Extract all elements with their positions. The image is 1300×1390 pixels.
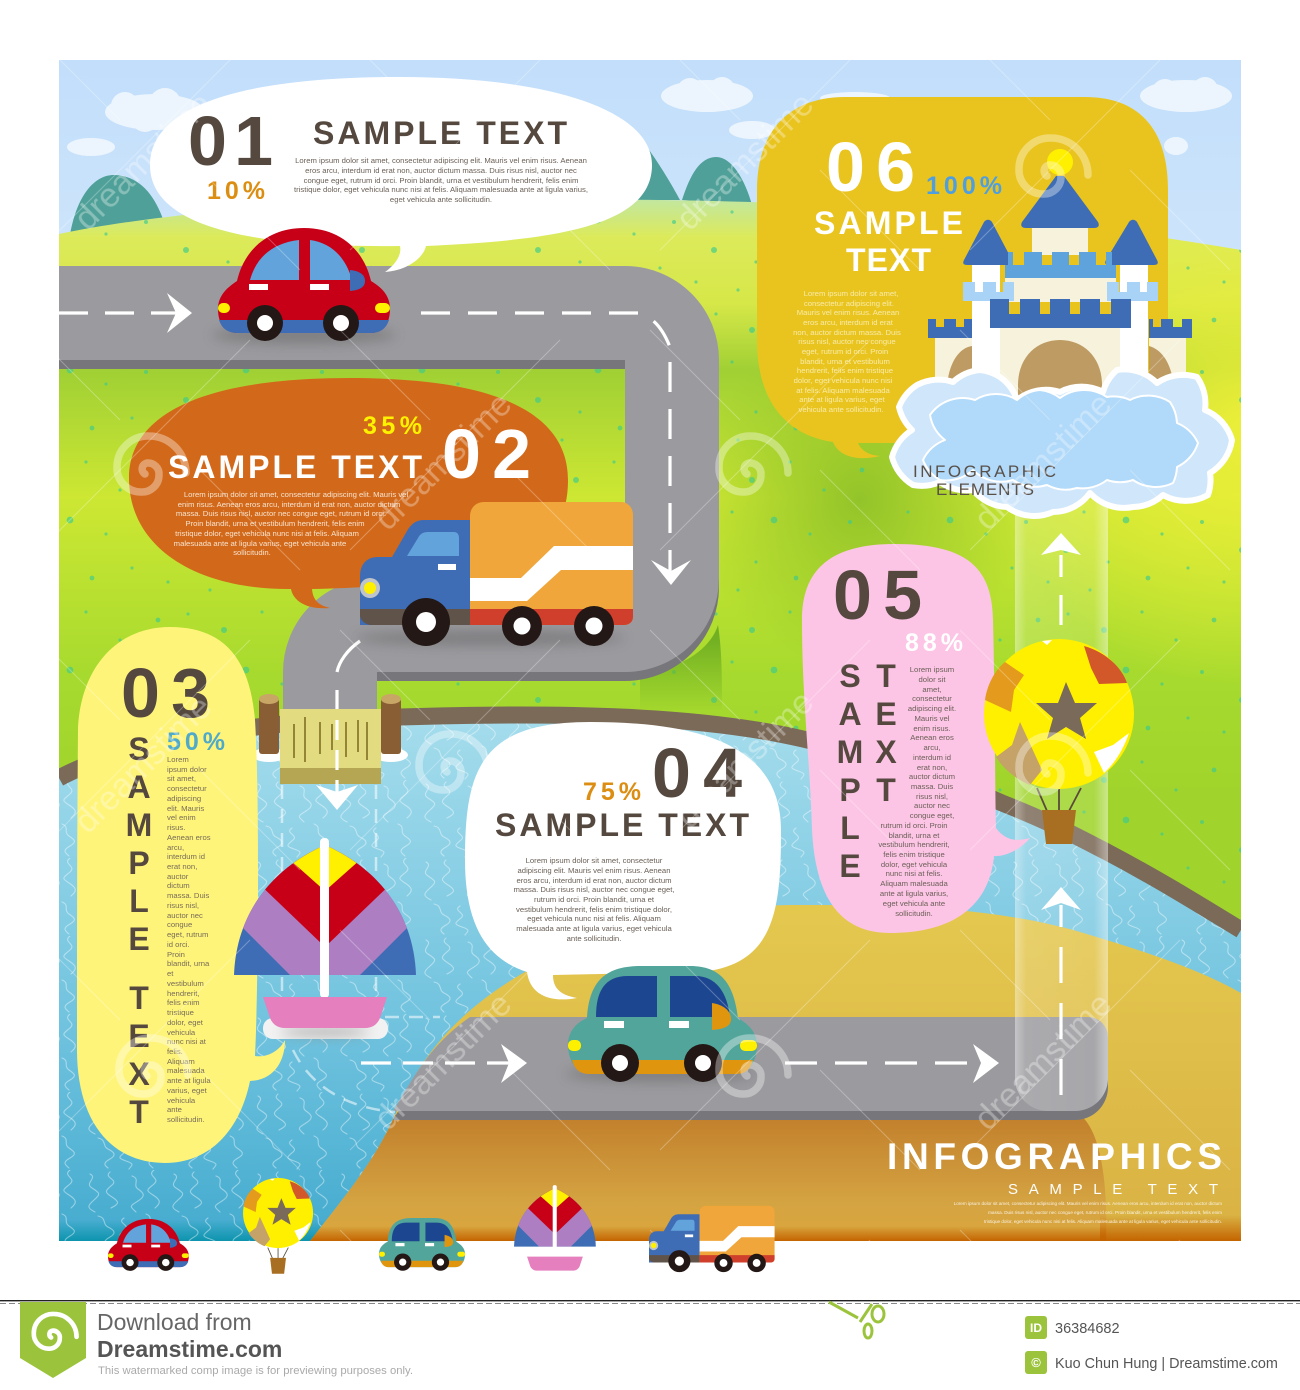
body 06: at felis. Aliquam malesuada xyxy=(796,386,891,395)
fine print xyxy=(954,1201,1222,1224)
body 05: erat non, xyxy=(917,763,947,772)
river xyxy=(59,715,1241,1241)
body 05: arcu, xyxy=(923,743,941,752)
body 05: auctor nec xyxy=(914,801,950,810)
icon: truck xyxy=(649,1206,775,1272)
body 06: eros arcu, interdum id erat xyxy=(803,318,894,327)
sky xyxy=(59,60,1241,250)
body 05: enim risus. xyxy=(913,724,951,733)
body 03: vel enim xyxy=(167,813,196,822)
cloud caption xyxy=(913,462,1056,499)
body 05: auctor dictum xyxy=(909,772,955,781)
vertical heading 05: S xyxy=(839,658,861,694)
body 05: blandit, urna et xyxy=(889,831,940,840)
percent 35: 35% xyxy=(363,412,422,440)
footer badge xyxy=(20,1302,86,1378)
body 06: non, auctor dictum massa. Duis xyxy=(793,328,901,337)
arrow right road 2 xyxy=(501,1044,527,1083)
arrow down at bridge xyxy=(316,785,358,810)
body 03: vestibulum xyxy=(167,979,204,988)
body 03: vehicula xyxy=(167,1096,196,1105)
body 01: tristique dolor, eget vehicula nunc nisi at felis. Aliquam malesuada ante at ligula varius, xyxy=(294,185,588,194)
body 03: dictum xyxy=(167,881,190,890)
body 05: rutrum id orci. Proin xyxy=(880,821,948,830)
vertical heading 05: E xyxy=(839,848,861,884)
footer download text: Download from xyxy=(97,1309,252,1335)
body 03: eget, rutrum xyxy=(167,930,208,939)
body 05: risus nisl, xyxy=(916,792,948,801)
body 03: risus. xyxy=(167,823,185,832)
body 02: sollicitudin. xyxy=(233,548,271,557)
footer credit: © xyxy=(1031,1355,1041,1370)
percent 88: 88% xyxy=(905,629,963,657)
body 06: dolor, eget vehicula nunc nisi xyxy=(794,376,893,385)
body 03 xyxy=(167,755,211,1124)
body 01: Lorem ipsum dolor sit amet, consectetur adipiscing elit. Mauris vel enim risus. Aenean xyxy=(295,156,587,165)
body 03: ipsum dolor xyxy=(167,765,207,774)
body 05: dolor sit xyxy=(919,675,946,684)
title block xyxy=(887,1136,1222,1224)
icon: red car xyxy=(108,1219,189,1271)
body 02: Proin blandit, urna et vestibulum hendrerit, felis enim xyxy=(185,519,365,528)
body 04: eget vehicula nunc nisi at felis. Aliquam xyxy=(527,914,661,923)
body 04 xyxy=(513,856,675,943)
arrow down road 1 xyxy=(651,560,691,585)
arrow right road 2 end xyxy=(973,1044,999,1083)
vertical heading 03: A xyxy=(127,769,151,805)
vertical heading 05: A xyxy=(838,696,862,732)
body 03: tristique xyxy=(167,1008,194,1017)
footer id: ID xyxy=(1030,1321,1042,1335)
teal car xyxy=(565,966,757,1082)
body 05: Lorem ipsum xyxy=(910,665,954,674)
sky clouds xyxy=(67,77,1232,156)
vertical heading 03: M xyxy=(126,807,152,843)
body 05: Aliquam malesuada xyxy=(880,879,948,888)
hot air balloon xyxy=(984,639,1134,844)
body 05: Mauris vel xyxy=(914,714,950,723)
body 04: ante sollicitudin. xyxy=(567,934,621,943)
watermarks: dreamstime xyxy=(967,385,1119,538)
number 02: 02 xyxy=(442,415,531,493)
vertical heading 05: M xyxy=(837,734,863,770)
bubble 01 xyxy=(150,77,652,272)
body 03: malesuada xyxy=(167,1066,205,1075)
arrow right road 1 xyxy=(167,293,192,333)
body 05: eget vehicula ante xyxy=(883,899,945,908)
body 05: dolor, eget vehicula xyxy=(881,860,948,869)
body 03: congue xyxy=(167,920,192,929)
heading 06 line 2: TEXT xyxy=(846,242,931,278)
fine print: Lorem ipsum dolor sit amet, consectetur adipiscing elit. Mauris vel enim risus. Aenean eros arcu, interdum id erat non, auctor dictum xyxy=(954,1201,1222,1206)
body 04: adipiscing elit. Mauris vel enim risus. Aenean xyxy=(518,866,670,875)
watermarks: dreamstime xyxy=(67,85,219,238)
body 03: id orci. xyxy=(167,940,190,949)
body 03: felis. xyxy=(167,1047,183,1056)
body 03: interdum id xyxy=(167,852,205,861)
body 03: massa. Duis xyxy=(167,891,209,900)
watermarks: dreamstime xyxy=(967,985,1119,1138)
heading 02: SAMPLE TEXT xyxy=(168,449,422,485)
body 04: Lorem ipsum dolor sit amet, consectetur xyxy=(526,856,663,865)
footer id: 36384682 xyxy=(1055,1321,1120,1337)
icon: balloon xyxy=(243,1178,313,1274)
percent 100: 100% xyxy=(926,172,1002,200)
body 06 xyxy=(793,289,901,414)
arrow up in tube xyxy=(1041,887,1081,910)
body 01: congue eget, rutrum id orci. Proin blandit, urna et vestibulum hendrerit, felis enim xyxy=(304,176,578,185)
glass tube xyxy=(1015,500,1108,1111)
sand xyxy=(310,905,1241,1241)
body 03: felis enim xyxy=(167,998,199,1007)
body 02 xyxy=(174,490,408,557)
bubble 04 xyxy=(465,722,781,999)
body 06: ante at ligula varius, eget xyxy=(799,395,886,404)
body 02: malesuada ante at ligula varius, eget vehicula ante xyxy=(174,539,346,548)
body 03: varius, eget xyxy=(167,1086,208,1095)
footer download text: Dreamstime.com xyxy=(97,1336,282,1362)
body 03: ante at ligula xyxy=(167,1076,211,1085)
body 06: Mauris vel enim risus. Aenean xyxy=(797,308,899,317)
vertical heading 03: T xyxy=(129,980,149,1016)
footer credit: Kuo Chun Hung | Dreamstime.com xyxy=(1055,1356,1278,1372)
bubble 03 xyxy=(77,627,285,1163)
percent 50: 50% xyxy=(167,728,225,756)
vertical heading 03: P xyxy=(128,845,150,881)
watermarks: dreamstime xyxy=(669,683,821,836)
body 06: eget, rutrum id orci. Proin xyxy=(802,347,888,356)
body 02: tristique dolor, eget vehicula nunc nisi at felis. Aliquam xyxy=(175,529,359,538)
body 03: hendrerit, xyxy=(167,989,199,998)
body 04: massa. Duis risus nisl, auctor nec congue eget, xyxy=(513,885,675,894)
watermarks: dreamstime xyxy=(367,985,519,1138)
vertical heading 05 xyxy=(837,658,897,884)
body 05: interdum id xyxy=(913,753,951,762)
arrow up top xyxy=(1041,533,1081,555)
body 02: massa. Duis risus nisl, auctor nec congue eget, rutrum id orci. xyxy=(176,509,386,518)
watermarks xyxy=(59,60,1241,1241)
heading 04: SAMPLE TEXT xyxy=(495,807,749,843)
body 01 xyxy=(294,156,588,204)
body 05: massa. Duis xyxy=(911,782,953,791)
castle xyxy=(928,149,1192,398)
body 05: congue eget, xyxy=(910,811,954,820)
vertical heading 03: X xyxy=(128,1056,150,1092)
watermarks: dreamstime xyxy=(67,688,219,841)
fine print: massa. Duis risus nisl, auctor nec congue eget, rutrum id orci. Proin blandit, urna et vestibulum hendrerit, felis enim xyxy=(988,1210,1222,1215)
cloud caption: ELEMENTS xyxy=(936,480,1034,499)
body 02: enim risus. Aenean eros arcu, interdum id erat non, auctor dictum xyxy=(178,500,400,509)
body 06: blandit, urna et vestibulum xyxy=(800,357,890,366)
body 01: eros arcu, interdum id erat non, auctor dictum massa. Duis risus nisl, auctor nec xyxy=(305,166,577,175)
body 03: Aenean eros xyxy=(167,833,211,842)
footer download text xyxy=(97,1309,413,1377)
vertical heading 05: X xyxy=(875,734,897,770)
body 04: rutrum id orci. Proin blandit, urna et xyxy=(534,895,655,904)
body 05: Aenean eros xyxy=(910,733,954,742)
heading 01: SAMPLE TEXT xyxy=(313,115,567,151)
cloud under castle xyxy=(892,369,1232,516)
body 03: Lorem xyxy=(167,755,189,764)
body 05: adipiscing elit. xyxy=(908,704,956,713)
body 03: elit. Mauris xyxy=(167,804,204,813)
vertical heading 03: S xyxy=(128,731,150,767)
number 04: 04 xyxy=(652,734,742,812)
footer separator xyxy=(0,1300,1300,1304)
bubble 05 xyxy=(802,544,1030,933)
body 05: nunc nisi at felis. xyxy=(886,869,942,878)
body 03: ante xyxy=(167,1105,182,1114)
body 04: eros arcu, interdum id erat non, auctor dictum xyxy=(516,876,672,885)
main title: INFOGRAPHICS xyxy=(887,1136,1222,1177)
hills xyxy=(70,150,751,232)
footer credit xyxy=(1025,1351,1278,1374)
vertical heading 05: T xyxy=(876,658,896,694)
bubble 02 xyxy=(129,378,568,608)
grass xyxy=(59,200,1241,960)
sailboat xyxy=(194,800,456,1039)
body 05: vestibulum hendrerit, xyxy=(878,840,950,849)
river bank xyxy=(59,715,1241,930)
watermarks: dreamstime xyxy=(367,385,519,538)
body 03: auctor xyxy=(167,872,189,881)
body 06: risus nisl, auctor nec congue xyxy=(798,337,896,346)
green shadow under road curve xyxy=(640,625,722,702)
body 04: malesuada ante at ligula varius, eget vehicula xyxy=(516,924,672,933)
vertical heading 03: E xyxy=(128,921,150,957)
body 05: ante at ligula varius, xyxy=(880,889,948,898)
small icons row xyxy=(108,1168,775,1274)
truck xyxy=(355,502,633,646)
body 03: arcu, xyxy=(167,843,184,852)
number 05: 05 xyxy=(833,556,922,634)
vertical heading 05: P xyxy=(839,772,861,808)
body 01: eget vehicula ante sollicitudin. xyxy=(390,195,492,204)
body 03: sollicitudin. xyxy=(167,1115,205,1124)
number 03: 03 xyxy=(121,654,210,732)
cloud caption: INFOGRAPHIC xyxy=(913,462,1056,481)
bridge xyxy=(252,694,408,785)
red car xyxy=(212,228,396,344)
body 03: Aliquam xyxy=(167,1057,195,1066)
footer download text: This watermarked comp image is for previewing purposes only. xyxy=(98,1365,413,1377)
body 03: vehicula xyxy=(167,1028,196,1037)
body 05: consectetur xyxy=(912,694,952,703)
body 05: felis enim tristique xyxy=(883,850,945,859)
percent 75: 75% xyxy=(583,778,641,806)
body 03: auctor nec xyxy=(167,911,203,920)
fine print: tristique dolor, eget vehicula nunc nisi at felis. Aliquam malesuada ante at ligula varius, eget vehicula ante sollicitudin. xyxy=(984,1219,1222,1224)
road: upper winding section xyxy=(59,313,672,725)
icon: teal car xyxy=(379,1218,465,1271)
body 06: hendrerit, felis enim tristique xyxy=(797,366,893,375)
body 03: et xyxy=(167,969,174,978)
body 03: sit amet, xyxy=(167,774,196,783)
body 03: risus nisl, xyxy=(167,901,199,910)
number 01: 01 xyxy=(188,102,273,180)
body 03: Proin xyxy=(167,950,185,959)
body 06: consectetur adipiscing elit. xyxy=(804,299,894,308)
route dashes and arrows xyxy=(59,313,1061,1095)
watermarks: dreamstime xyxy=(669,85,821,238)
vertical heading 03: L xyxy=(129,883,149,919)
heading 06 line 1: SAMPLE xyxy=(814,205,963,241)
body 03: erat non, xyxy=(167,862,197,871)
panel: landscape background xyxy=(59,60,1241,1241)
body 05 xyxy=(878,665,956,918)
icon: scissors xyxy=(829,1302,884,1338)
vertical heading 03: E xyxy=(128,1018,150,1054)
body 03: adipiscing xyxy=(167,794,201,803)
body 05: sollicitudin. xyxy=(895,909,933,918)
body 05: amet, xyxy=(922,685,942,694)
vertical heading 05: E xyxy=(875,696,897,732)
vertical heading 05: T xyxy=(876,772,896,808)
panel: castle bubble 06 xyxy=(757,97,1168,458)
body 03: nunc nisi at xyxy=(167,1037,207,1046)
vertical heading 03 xyxy=(126,731,152,1130)
body 06: vehicula ante sollicitudin. xyxy=(798,405,884,414)
number 06: 06 xyxy=(826,128,915,206)
road: lower section xyxy=(393,1017,1108,1120)
body 03: dolor, eget xyxy=(167,1018,204,1027)
vertical heading 03: T xyxy=(129,1094,149,1130)
subtitle: SAMPLE TEXT xyxy=(1008,1181,1218,1198)
percent 10: 10% xyxy=(207,177,265,205)
body 06: Lorem ipsum dolor sit amet, xyxy=(804,289,898,298)
footer id xyxy=(1025,1316,1120,1339)
icon: sailboat xyxy=(496,1168,614,1271)
body 04: vestibulum hendrerit, felis enim tristique dolor, xyxy=(516,905,672,914)
body 03: blandit, urna xyxy=(167,959,210,968)
body 03: consectetur xyxy=(167,784,207,793)
body 02: Lorem ipsum dolor sit amet, consectetur adipiscing elit. Mauris vel xyxy=(184,490,408,499)
vertical heading 05: L xyxy=(840,810,860,846)
